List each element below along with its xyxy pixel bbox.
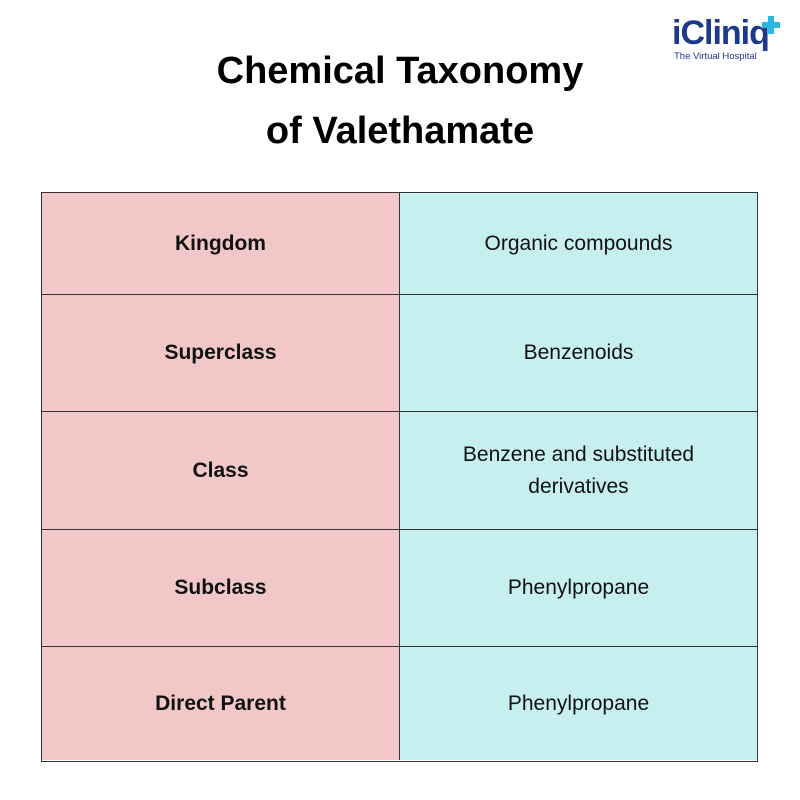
row: subclass: Subclass [174, 576, 267, 599]
row: class: Class [192, 458, 249, 482]
table [41, 192, 758, 762]
row: direct parent [42, 646, 757, 760]
row: kingdom [42, 193, 757, 294]
row: superclass: Benzenoids [524, 341, 633, 364]
row: kingdom: Kingdom [175, 232, 266, 254]
row: class [42, 411, 757, 529]
row: superclass [42, 294, 757, 411]
row: subclass: Phenylpropane [508, 576, 649, 599]
row: direct parent: Direct Parent [155, 692, 286, 714]
logo: The Virtual Hospital [674, 51, 757, 62]
title: of Valethamate [266, 110, 534, 152]
row: subclass [42, 529, 757, 646]
logo: iCliniq [672, 14, 769, 52]
row: class: Benzene and substituted [463, 442, 694, 466]
title: Chemical Taxonomy [217, 50, 583, 92]
title [217, 50, 584, 152]
row: superclass: Superclass [164, 341, 277, 364]
row: direct parent: Phenylpropane [508, 692, 649, 714]
row: kingdom: Organic compounds [485, 232, 672, 254]
row: class: derivatives [528, 474, 629, 498]
